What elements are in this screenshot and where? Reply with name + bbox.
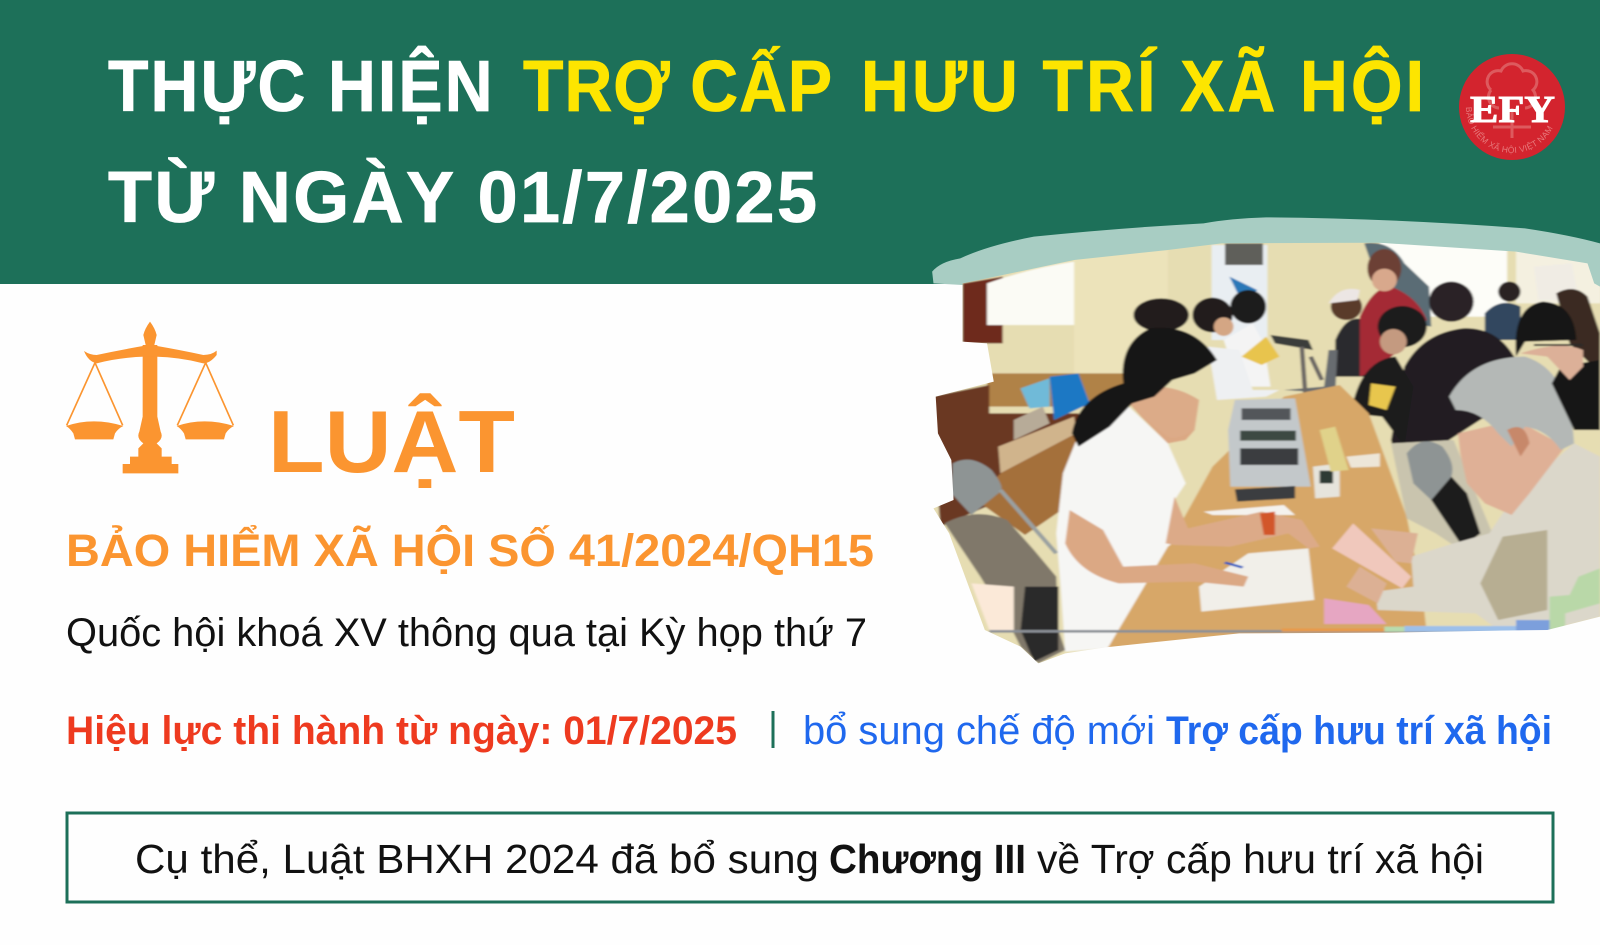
- heading: LUẬT: LUẬT: [268, 392, 515, 491]
- desk: [1101, 385, 1427, 650]
- text: new regime: [803, 709, 1552, 753]
- title: [108, 45, 1424, 238]
- photo: staff paying elderly people at a counter: [927, 217, 1600, 667]
- logo: EFY badge: [1459, 54, 1565, 160]
- logo flower emblem: [1487, 64, 1537, 138]
- bag and trousers behind chair: [1391, 439, 1492, 544]
- subheading: law number: BẢO HIỂM XÃ HỘI SỐ 41/2024/QH15: [66, 525, 874, 576]
- chair left and jacket: [951, 460, 1002, 515]
- logo ring text: BẢO HIỂM XÃ HỘI VIỆT NAM: [1466, 107, 1552, 154]
- air conditioner: [1212, 245, 1267, 340]
- chair right: [1407, 441, 1452, 500]
- hands and passbook: [1346, 528, 1418, 603]
- logo wordmark: EFY: [1470, 89, 1555, 131]
- staff in back: [1224, 323, 1271, 387]
- text: new regime: Trợ cấp hưu trí xã hội: [1166, 709, 1552, 753]
- woman in white shirt: [1056, 403, 1186, 652]
- old man jacket: [1375, 443, 1600, 630]
- text: passed by National Assembly: Quốc hội khoá XV thông qua tại Kỳ họp thứ 7: [66, 611, 867, 655]
- divider bar: [772, 711, 774, 748]
- header band: [0, 0, 1600, 284]
- callout box: Chapter III: Chương III: [829, 836, 1026, 882]
- icon: scales of justice: [66, 322, 234, 473]
- back people: [1534, 263, 1579, 300]
- mint brush frame: [932, 217, 1600, 287]
- old man head: [1458, 420, 1565, 515]
- callout box: Chapter III: Cụ thể, Luật BHXH 2024 đã bổ sung: [135, 836, 819, 882]
- papers: [1204, 505, 1295, 515]
- text: effective date: Hiệu lực thi hành từ ngày: 01/7/2025: [66, 709, 737, 753]
- callout box: Chapter III: [67, 813, 1553, 902]
- text: new regime: bổ sung chế độ mới: [803, 709, 1155, 753]
- callout box: Chapter III: về Trợ cấp hưu trí xã hội: [1037, 836, 1484, 882]
- man with glasses: [1552, 360, 1600, 430]
- title: TRỢ CẤP: [523, 45, 832, 127]
- bottom colour bar: [989, 630, 1498, 633]
- title: THỰC HIỆN: [108, 45, 493, 127]
- bags: [1021, 378, 1050, 408]
- title: TỪ NGÀY 01/7/2025: [108, 157, 817, 238]
- money counter: [1228, 398, 1311, 487]
- title: HƯU TRÍ XÃ HỘI: [861, 45, 1424, 127]
